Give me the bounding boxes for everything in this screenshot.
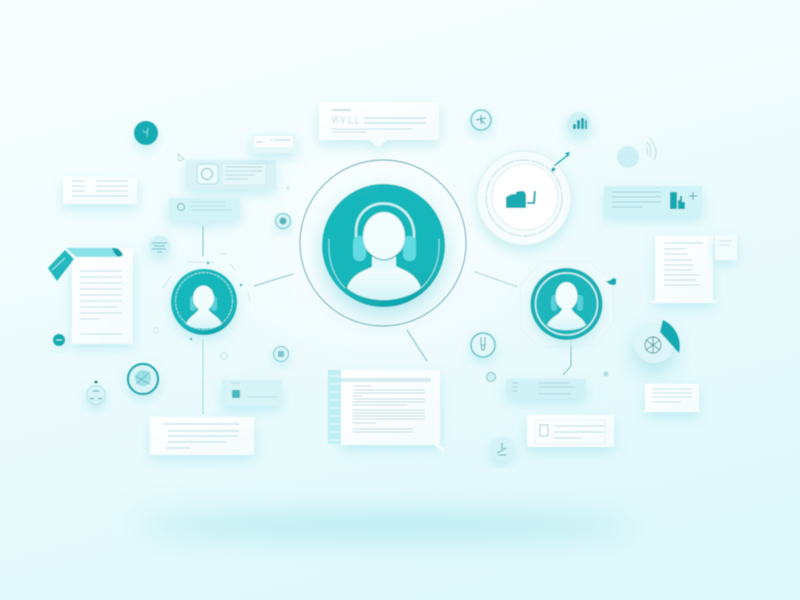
connector lines: [203, 221, 571, 415]
icon: small teal badge: [53, 334, 65, 346]
pie chart with brain icon: [634, 320, 680, 363]
icon: bars: [670, 192, 685, 209]
icon: small dots: [154, 186, 290, 360]
icon: sound disc with waves: [617, 138, 656, 168]
big ring with factory icon: [477, 151, 571, 245]
panel: right document with tab: [650, 235, 737, 303]
pie wedge: [660, 320, 680, 353]
sidebar: [328, 370, 341, 444]
panel: bottom-left white card: [150, 417, 254, 455]
icon: smiley badge: [276, 214, 290, 228]
panel: small white note right: [643, 384, 701, 412]
icon: doc badge: [274, 346, 288, 362]
panel: tinted card with chart icon: [604, 186, 702, 219]
ribbon: [48, 248, 123, 281]
icon: plant badge: [471, 333, 495, 357]
central agent: outer ring: [300, 160, 466, 326]
arrow: [551, 152, 570, 172]
icon: star badge: [471, 110, 491, 130]
icon: factory: [506, 191, 536, 208]
top speech bubble: [319, 102, 439, 147]
icon: waves badge: [149, 236, 170, 256]
panel: centre document: [328, 370, 444, 450]
icon: brain: [645, 337, 661, 353]
icon: teal leaf badge: [134, 121, 158, 145]
panel: small top card: [251, 134, 296, 153]
central agent: teal disc: [322, 184, 445, 307]
left agent: silhouette: [186, 286, 222, 328]
left agent: headset: [190, 296, 217, 311]
icon: gardener badge: [490, 437, 514, 461]
panel: top-left white note: [63, 177, 137, 204]
side tab: [715, 235, 737, 260]
panel: white card lower right: [527, 415, 614, 447]
floor shadow: [135, 515, 635, 537]
icon: bar chart badge: [567, 112, 591, 136]
panel: tinted card lower right: [506, 379, 586, 398]
left agent: dashed orbit: [163, 254, 250, 340]
panel: tinted card lower left: [222, 380, 282, 406]
icon: bulb badge: [86, 380, 106, 404]
right agent: headset: [551, 295, 583, 311]
icon: small spiral: [486, 372, 496, 382]
central agent: headset: [353, 204, 416, 261]
right agent: silhouette: [547, 282, 586, 330]
panel: left document with ribbon: [48, 248, 133, 344]
right agent node: [520, 262, 616, 347]
panel: tinted card with icon: [186, 160, 276, 189]
central agent: silhouette: [347, 212, 421, 300]
icon: robot badge: [128, 364, 158, 394]
right agent: gear outline: [520, 262, 614, 347]
left agent node: [163, 254, 250, 340]
icon: small grey dot: [604, 372, 608, 376]
right agent: small bird tag: [606, 278, 616, 285]
icon: pointer: [178, 154, 184, 161]
panel: tinted bubble: [169, 198, 240, 226]
